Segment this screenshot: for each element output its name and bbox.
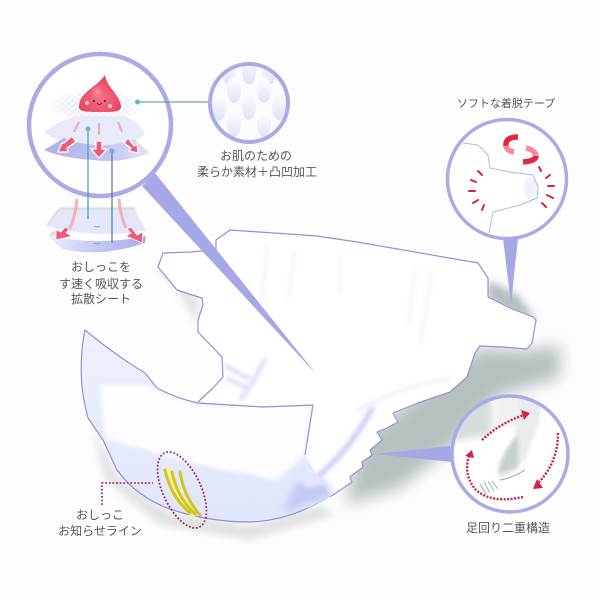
sheet lower (48, 236, 146, 252)
label: leg gather: 足回り二重構造 (466, 521, 550, 535)
label: diffusion sheet: おしっこを (71, 260, 131, 274)
dotted arrow right (533, 433, 558, 489)
tension ticks (469, 167, 554, 210)
sheet upper (48, 210, 146, 234)
diaper cast shadow (92, 256, 560, 540)
label: soft material (197, 149, 317, 179)
diaper outline (158, 230, 536, 508)
label: wetness indicator: お知らせライン (58, 524, 142, 538)
pink arrow center (91, 141, 107, 158)
panel: leg gather magnifier (450, 395, 568, 512)
label: soft material: お肌のための (220, 149, 292, 163)
ruffle lavender streak (317, 407, 373, 477)
front absorbent sheet (81, 330, 330, 522)
label: diffusion sheet: 拡散シート (71, 291, 131, 306)
front sheet outline (81, 330, 313, 522)
white textured panel (100, 385, 334, 512)
label: diffusion sheet: す速く吸収する (59, 277, 143, 291)
small faces (94, 226, 100, 244)
diaper illustration (81, 230, 560, 540)
arrow left (56, 227, 72, 240)
pink arrow left (58, 136, 76, 152)
label: soft tape: ソフトな着脱テープ (457, 96, 555, 110)
leg gather illustration (450, 395, 540, 494)
tape callout stem (503, 238, 518, 304)
sheet shadow (48, 209, 135, 236)
wetness indicator lines (165, 470, 200, 515)
label: wetness indicator (58, 508, 142, 538)
label: wetness indicator: おしっこ (76, 508, 124, 522)
diaper body (158, 230, 536, 508)
magnifier handle (142, 173, 317, 375)
absorption streaks (74, 122, 122, 135)
label: diffusion sheet (59, 260, 143, 306)
dotted leader line (102, 483, 153, 505)
arrow right (126, 227, 143, 243)
dotted arrow top (482, 410, 530, 440)
absorbent sheet lower (44, 138, 150, 161)
panel: absorbent layers magnifier (29, 54, 171, 196)
pink arrow right (124, 138, 138, 153)
water drop character (79, 75, 121, 112)
tape outline (463, 143, 538, 233)
panel: soft material circle (210, 50, 288, 142)
label: soft material: 柔らか素材＋凸凹加工 (197, 165, 317, 179)
panel: tape magnifier (448, 120, 566, 238)
leg callout wedge (375, 446, 452, 462)
magnifier lens (29, 54, 171, 196)
curved streaks (69, 199, 77, 230)
dotted arrow lower left (465, 450, 523, 499)
rotation arrows (506, 137, 536, 162)
lower layers diagram (48, 199, 146, 252)
soft folds (225, 245, 450, 412)
leader lines (86, 100, 208, 243)
top mesh (54, 92, 136, 118)
absorbent sheet upper (44, 116, 145, 149)
embossed scales (212, 66, 286, 137)
dotted callout ring (147, 445, 217, 535)
